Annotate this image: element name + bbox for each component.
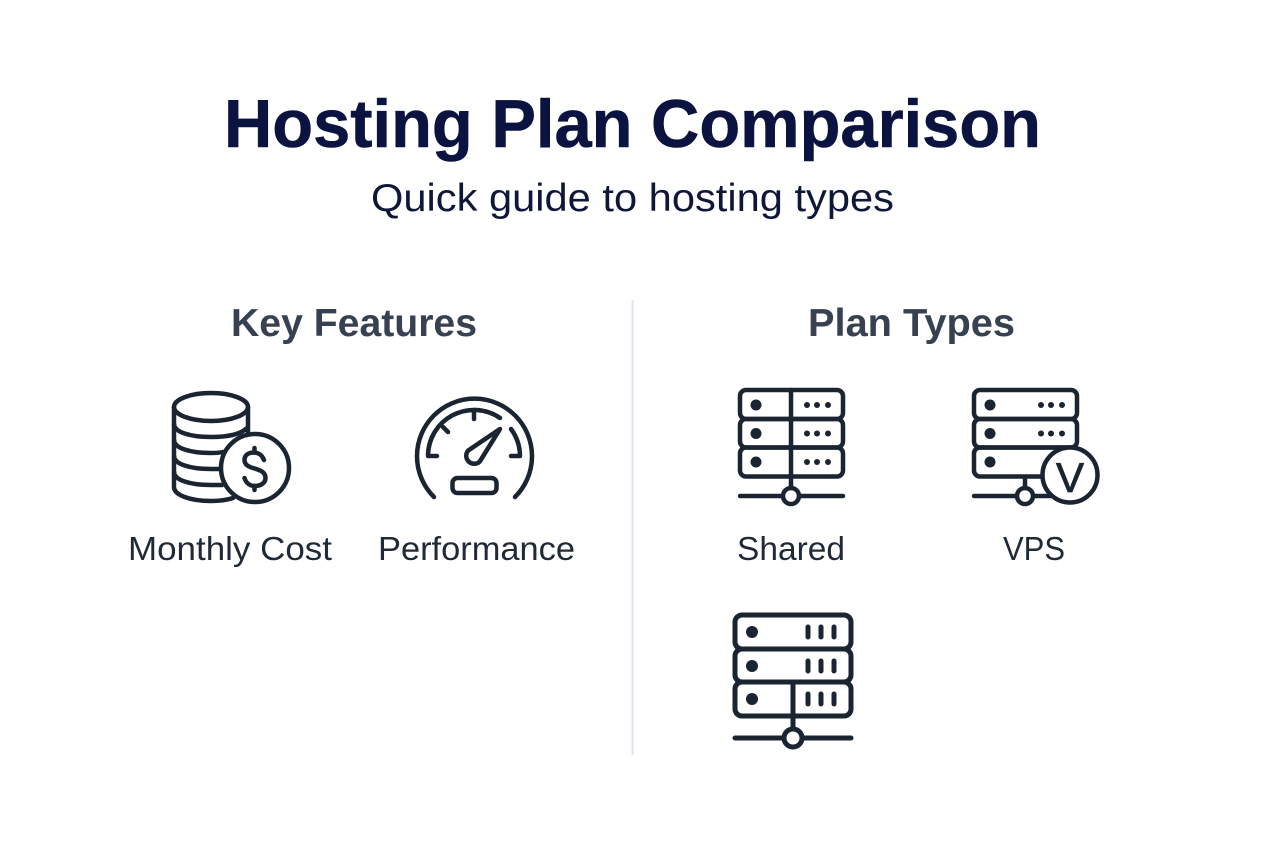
panel: plan types — [735, 302, 1098, 747]
icon: coin stack with dollar — [174, 393, 289, 502]
label: VPS: VPS — [1003, 530, 1065, 567]
icon: dedicated server — [735, 615, 851, 747]
icon: VPS server — [974, 390, 1098, 504]
heading: key features: Key Features — [231, 302, 477, 345]
label: shared: Shared — [737, 530, 845, 567]
icon: performance gauge — [417, 399, 532, 497]
icon: VPS server: V — [1056, 454, 1084, 501]
label: performance: Performance — [378, 530, 575, 567]
panel: key features — [128, 302, 575, 567]
icon: shared server — [740, 390, 843, 504]
title: Hosting Plan Comparison — [224, 86, 1041, 162]
subtitle: Quick guide to hosting types — [371, 177, 894, 220]
label: monthly cost: Monthly Cost — [128, 530, 332, 567]
heading: plan types: Plan Types — [808, 302, 1015, 345]
